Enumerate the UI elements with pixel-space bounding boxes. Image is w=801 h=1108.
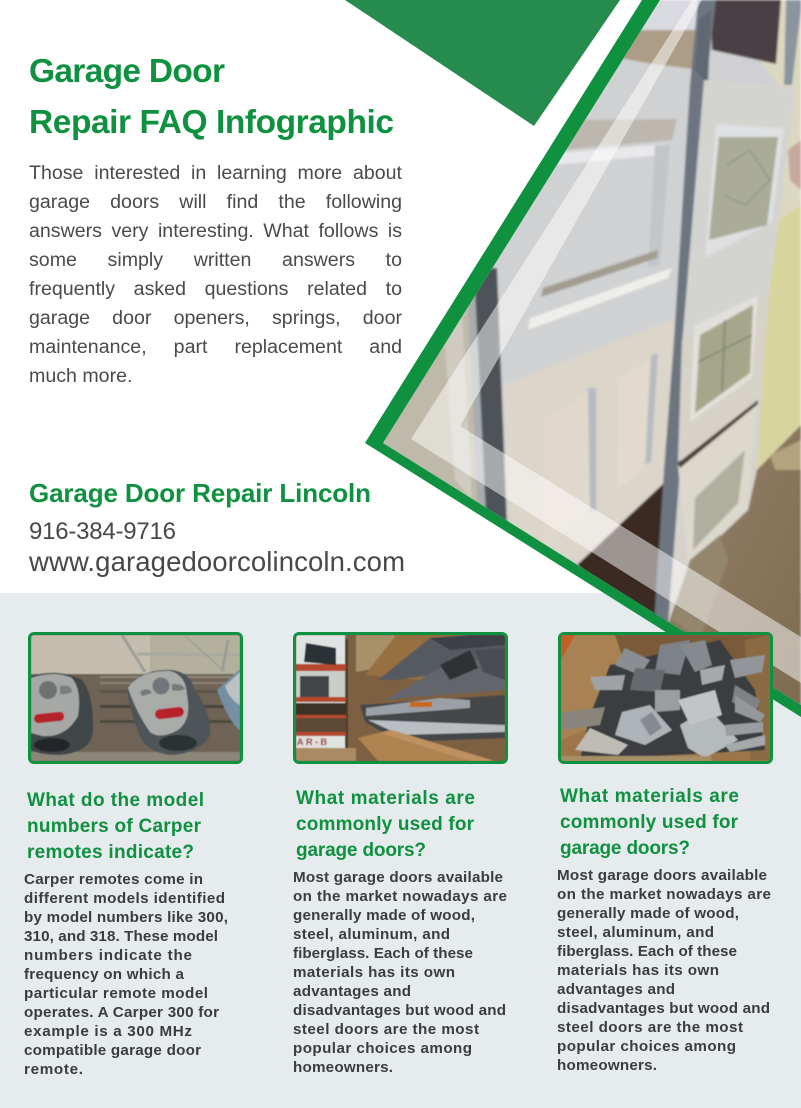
- column 1 body text: operates. A Carper 300 for: [24, 1004, 219, 1021]
- column 3 heading: garage doors?: [560, 838, 690, 859]
- column 1 body text: [24, 871, 228, 1078]
- column 3 body text: advantages and: [557, 981, 675, 998]
- contact block: 916-384-9716: [29, 518, 176, 545]
- dark under door: [577, 482, 665, 625]
- right door column lower: [676, 464, 682, 479]
- column 1 body text: 310, and 318. These model: [24, 928, 218, 945]
- intro paragraph: answers very interesting. What follows is: [29, 220, 402, 242]
- upper left door panel: [622, 58, 646, 64]
- photo card: metal brackets in box: [560, 634, 772, 762]
- photo card: garage door remotes: [30, 634, 242, 762]
- intro paragraph: [29, 162, 402, 387]
- right door column upper: [682, 80, 796, 345]
- column 2 body text: materials has its own: [293, 964, 455, 981]
- column 2 body text: popular choices among: [293, 1040, 472, 1057]
- left wall: [383, 309, 478, 502]
- column 1 body text: Carper remotes come in: [24, 871, 203, 888]
- column 2 body text: steel doors are the most: [293, 1021, 479, 1038]
- grey lower background panel: [0, 593, 801, 1108]
- column 1 body text: example is a 300 MHz: [24, 1023, 192, 1040]
- photo card: materials on shelves: [294, 634, 506, 762]
- red item on wall: [788, 140, 801, 190]
- red shelves: [296, 664, 346, 671]
- green chevron outline band: [365, 0, 801, 717]
- right door column middle: [678, 292, 770, 462]
- column 3 heading: commonly used for: [560, 812, 739, 833]
- column 3 heading: [560, 786, 739, 859]
- intro paragraph: frequently asked questions related to: [29, 278, 402, 300]
- column 3 body text: on the market nowadays are: [557, 886, 771, 903]
- remote right: [217, 669, 240, 731]
- contact block: www.garagedoorcolincoln.com: [28, 546, 405, 577]
- column 1 body text: compatible garage door: [24, 1042, 201, 1059]
- contact block: [28, 478, 405, 577]
- hero photo of garage doors: [360, 0, 801, 720]
- column 1 body text: remote.: [24, 1061, 83, 1078]
- column 2 body text: on the market nowadays are: [293, 888, 507, 905]
- translucent white ribbon over photo: [411, 0, 801, 683]
- column 2 body text: generally made of wood,: [293, 907, 475, 924]
- central post: [654, 0, 716, 625]
- intro paragraph: much more.: [29, 365, 132, 387]
- floor: [668, 424, 801, 705]
- column 1 heading: [27, 790, 204, 863]
- intro paragraph: maintenance, part replacement and: [29, 336, 402, 358]
- column 1 heading: remotes indicate?: [27, 842, 194, 863]
- column 3 body text: fiberglass. Each of these: [557, 943, 737, 960]
- column 1 heading: numbers of Carper: [27, 816, 202, 837]
- column 3 body text: homeowners.: [557, 1057, 657, 1074]
- remote left: [31, 673, 93, 755]
- column 3 heading: What materials are: [560, 786, 739, 807]
- column 2 body text: advantages and: [293, 983, 411, 1000]
- column 3 body text: generally made of wood,: [557, 905, 739, 922]
- column 3 body text: steel doors are the most: [557, 1019, 743, 1036]
- column 1 body text: numbers indicate the: [24, 947, 192, 964]
- column 2 body text: [293, 869, 507, 1076]
- title: [29, 53, 394, 141]
- top green triangle: [345, 0, 620, 126]
- contact block: Garage Door Repair Lincoln: [29, 478, 371, 508]
- intro paragraph: Those interested in learning more about: [29, 162, 402, 184]
- poster: [711, 0, 781, 64]
- column 2 heading: [296, 788, 475, 861]
- column 2 body text: homeowners.: [293, 1059, 393, 1076]
- column 2 body text: fiberglass. Each of these: [293, 945, 473, 962]
- intro paragraph: some simply written answers to: [29, 249, 402, 271]
- title: Repair FAQ Infographic: [29, 104, 394, 141]
- column 3 body text: steel, aluminum, and: [557, 924, 714, 941]
- column 1 body text: different models identified: [24, 890, 225, 907]
- column 2 body text: disadvantages but wood and: [293, 1002, 506, 1019]
- left dark post: [472, 268, 507, 525]
- column 3 body text: Most garage doors available: [557, 867, 767, 884]
- timber: [358, 730, 480, 761]
- title: Garage Door: [29, 53, 225, 90]
- intro paragraph: garage door openers, springs, door: [29, 307, 402, 329]
- column 1 body text: particular remote model: [24, 985, 208, 1002]
- yellow wall: [757, 205, 801, 470]
- column 1 body text: by model numbers like 300,: [24, 909, 228, 926]
- photo card: materials on shelves: AR-B: [297, 737, 328, 747]
- remote centre: [127, 670, 210, 755]
- column 3 body text: [557, 867, 771, 1074]
- lower left door panel: [531, 320, 675, 376]
- column 2 body text: steel, aluminum, and: [293, 926, 450, 943]
- column 2 body text: Most garage doors available: [293, 869, 503, 886]
- column 3 body text: disadvantages but wood and: [557, 1000, 770, 1017]
- column 2 heading: commonly used for: [296, 814, 475, 835]
- steel racks: [378, 635, 505, 680]
- intro paragraph: garage doors will find the following: [29, 191, 402, 213]
- column 1 heading: What do the model: [27, 790, 204, 811]
- column 3 body text: popular choices among: [557, 1038, 736, 1055]
- column 2 heading: What materials are: [296, 788, 475, 809]
- column 1 body text: frequency on which a: [24, 966, 185, 983]
- column 2 heading: garage doors?: [296, 840, 426, 861]
- upper backdrop: [642, 0, 697, 30]
- column 3 body text: materials has its own: [557, 962, 719, 979]
- right back post: [784, 0, 801, 85]
